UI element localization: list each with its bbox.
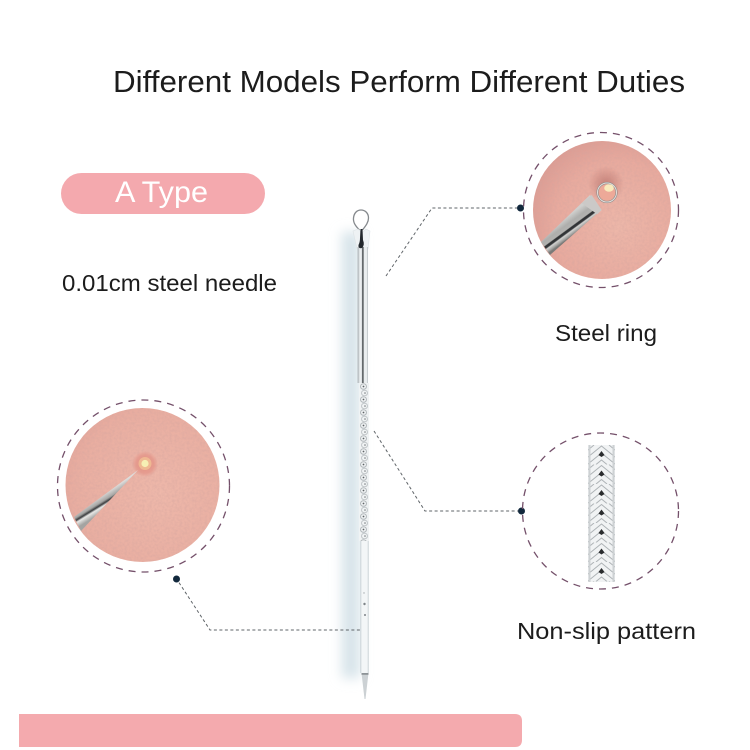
detail circle: steel ring [524, 132, 678, 288]
leader: needle [173, 576, 361, 630]
tool ring [353, 210, 368, 230]
type badge [61, 173, 265, 214]
detail circle: non-slip pattern [522, 433, 678, 589]
type badge: A Type [115, 176, 208, 209]
tool shaft [358, 247, 368, 383]
tool shadow [342, 232, 360, 678]
title: Different Models Perform Different Duties [113, 65, 685, 99]
tool lower shaft [360, 541, 369, 673]
label: steel ring: Steel ring [555, 320, 657, 346]
bottom bar [19, 714, 522, 747]
leader: steel ring [386, 204, 524, 276]
needle description: 0.01cm steel needle [62, 270, 277, 296]
tool grip [359, 383, 369, 541]
tool tip [362, 673, 368, 699]
leader: non-slip pattern [374, 431, 525, 514]
ring joint [358, 229, 364, 248]
detail circle: needle [58, 400, 230, 572]
tool collar [353, 229, 370, 249]
product: extractor tool [342, 210, 370, 699]
label: non-slip pattern: Non-slip pattern [517, 618, 696, 644]
